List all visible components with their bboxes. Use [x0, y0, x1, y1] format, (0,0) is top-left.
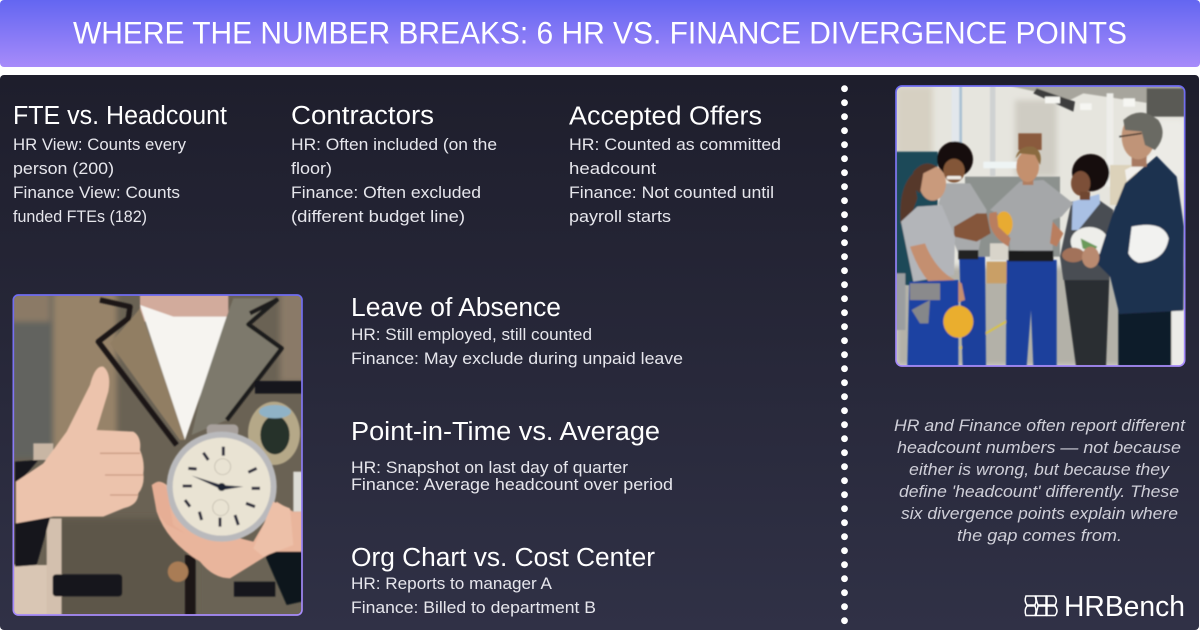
photo border	[896, 86, 1185, 366]
cuff and sleeve right	[266, 552, 302, 606]
woman in blazer	[1060, 154, 1113, 366]
block: Accepted Offers: payroll starts	[569, 207, 671, 226]
man with curly hair	[937, 141, 991, 366]
block: Accepted Offers: Finance: Not counted until	[569, 183, 774, 202]
jacket lapels	[98, 298, 283, 445]
block: FTE vs. Headcount: FTE vs. Headcount	[13, 102, 227, 130]
italic summary paragraph	[894, 416, 1186, 545]
block: Leave of Absence: Finance: May exclude during unpaid leave	[351, 349, 683, 368]
block: Contractors: floor)	[291, 159, 332, 178]
block: Leave of Absence: HR: Still employed, still counted	[351, 325, 592, 344]
block: Point-in-Time vs. Average: HR: Snapshot on last day of quarter	[351, 458, 628, 477]
block: Accepted Offers	[569, 102, 781, 226]
HRBench logo: HRBench	[1064, 591, 1185, 623]
block: Contractors: HR: Often included (on the	[291, 135, 497, 154]
italic summary paragraph: headcount numbers — not because	[897, 438, 1181, 457]
italic summary paragraph: six divergence points explain where	[901, 504, 1178, 523]
sleeve cuff left	[15, 460, 50, 567]
pocket watch	[167, 424, 277, 542]
photo: factory team with hard hats	[896, 86, 1185, 366]
fingers over watch	[151, 483, 169, 509]
block: FTE vs. Headcount: person (200)	[13, 159, 114, 178]
block: FTE vs. Headcount	[13, 102, 227, 226]
block: Org Chart vs. Cost Center: HR: Reports to manager A	[351, 574, 553, 593]
icon: logo mark	[1025, 596, 1057, 616]
block: Contractors: Finance: Often excluded	[291, 183, 481, 202]
photo border	[13, 295, 302, 615]
crest badge	[248, 402, 300, 465]
block: FTE vs. Headcount: HR View: Counts every	[13, 135, 186, 154]
italic summary paragraph: either is wrong, but because they	[909, 460, 1171, 479]
block: Leave of Absence: Leave of Absence	[351, 294, 561, 322]
block: Org Chart vs. Cost Center: Finance: Billed to department B	[351, 598, 596, 617]
block: Org Chart vs. Cost Center	[351, 544, 656, 617]
neck and shirt	[140, 295, 228, 440]
block: Accepted Offers: Accepted Offers	[569, 102, 762, 130]
man in suit	[1082, 112, 1184, 366]
title: WHERE THE NUMBER BREAKS: 6 HR VS. FINANCE DIVERGENCE POINTS	[73, 14, 1127, 50]
supporting hand	[153, 482, 302, 578]
header banner	[0, 0, 1200, 67]
block: Accepted Offers: HR: Counted as committed	[569, 135, 781, 154]
photo: thumbs up holding pocket watch	[10, 292, 307, 618]
block: Contractors: (different budget line)	[291, 207, 465, 226]
block: FTE vs. Headcount: funded FTEs (182)	[13, 207, 147, 226]
block: Point-in-Time vs. Average: Point-in-Time vs. Average	[351, 418, 660, 446]
block: Point-in-Time vs. Average	[351, 418, 673, 494]
block: Org Chart vs. Cost Center: Org Chart vs. Cost Center	[351, 544, 656, 572]
dotted vertical divider	[841, 89, 848, 625]
italic summary paragraph: HR and Finance often report different	[894, 416, 1186, 435]
block: Leave of Absence	[351, 294, 683, 368]
block: Contractors	[291, 102, 497, 226]
block: Contractors: Contractors	[291, 102, 434, 130]
block: Accepted Offers: headcount	[569, 159, 656, 178]
thumbs-up hand	[16, 367, 144, 523]
block: FTE vs. Headcount: Finance View: Counts	[13, 183, 180, 202]
woman in grey tee	[900, 163, 973, 366]
italic summary paragraph: define 'headcount' differently. These	[899, 482, 1179, 501]
man in grey tee	[989, 146, 1073, 366]
block: Point-in-Time vs. Average: Finance: Average headcount over period	[351, 475, 673, 494]
italic summary paragraph: the gap comes from.	[957, 526, 1122, 545]
